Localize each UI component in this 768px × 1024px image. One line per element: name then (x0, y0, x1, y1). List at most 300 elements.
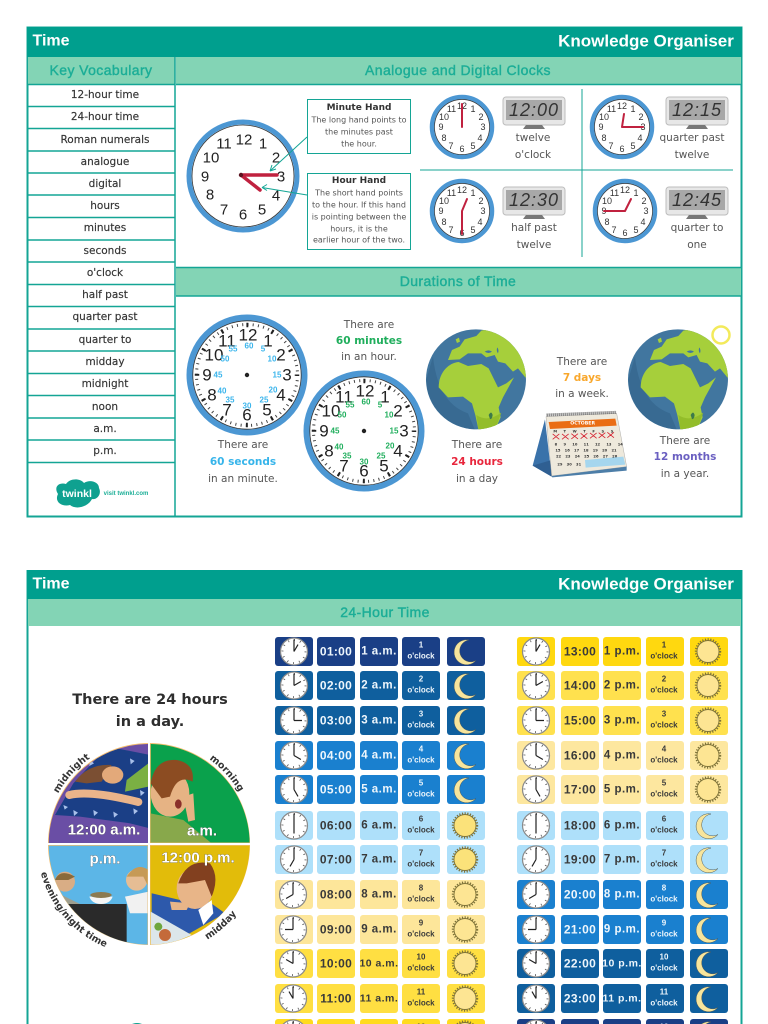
row: 02:00: 2 a.m. (361, 680, 397, 692)
icon: sun ring (712, 326, 730, 344)
clock: labelled clock: 6 (239, 206, 247, 224)
quadrant: evening and night (47, 845, 148, 945)
vocabulary list: 12-hour time (71, 89, 139, 101)
row: 20:00: 8 (662, 884, 667, 892)
row: 15:00: 3 p.m. (604, 714, 640, 726)
row: 02:00: 2 (419, 674, 424, 684)
row: 16:00: 4 (662, 744, 667, 754)
row: 09:00: 09:00 (320, 922, 352, 936)
row: 06:00: o'clock (407, 826, 435, 834)
panel: durations of time (176, 267, 741, 488)
clock: half past twelve: 4 (477, 217, 483, 227)
heading: analogue and digital clocks (176, 57, 741, 84)
row: 02:00: o'clock (407, 686, 435, 694)
clock: twelve o'clock: 8 (441, 133, 447, 143)
callout: minute hand: Minute Hand (327, 103, 391, 113)
icon: calendar: 29 30 31 (557, 463, 582, 467)
text: 60 seconds: in an minute. (208, 473, 278, 485)
vocabulary list: noon (92, 401, 118, 413)
row: 05:00: o'clock (407, 790, 435, 798)
text: 60 minutes: 60 minutes (336, 335, 402, 347)
row: 09:00: 9 (419, 918, 424, 928)
heading: there are 24 hours in a day: in a day. (116, 714, 184, 730)
clock: minutes: 60 (362, 398, 371, 406)
clock: half past twelve: 1 (470, 188, 476, 198)
row: 20:00: 8 p.m. (604, 888, 640, 900)
clock: minutes: 1 (380, 388, 390, 406)
clock: quarter to one: 9 (601, 206, 607, 216)
row: 10:00 (275, 949, 485, 978)
text: 60 minutes: There are (343, 319, 394, 331)
row: 09:00 (275, 915, 485, 944)
label: twelve o'clock (515, 132, 552, 161)
clock: quarter to one (595, 181, 655, 241)
vocabulary list: Roman numerals (60, 134, 150, 146)
row: 18:00 (517, 811, 728, 840)
clock: labelled clock: 5 (258, 202, 266, 218)
quadrant: midday (150, 845, 250, 947)
row: 00:00 (517, 1019, 728, 1024)
callout: hour hand: to the hour. If this hand (312, 200, 406, 210)
row: 13:00: 13:00 (564, 644, 596, 658)
clock: quarter past twelve: 12 (617, 101, 627, 111)
label: 12:00 p.m.: 12:00 p.m. (161, 850, 235, 866)
row: 18:00: 18:00 (564, 818, 596, 832)
row: 15:00: 15:00 (564, 714, 596, 728)
text: 24 hours: in a day (456, 473, 498, 485)
label: quarter past twelve: quarter past (660, 132, 724, 144)
clock: minutes: 4 (393, 442, 403, 460)
label: midnight: midnight (54, 754, 90, 793)
clock: seconds: 7 (222, 400, 232, 420)
row: 18:00: 6 (662, 814, 667, 824)
clock: quarter past twelve: 10 (599, 112, 609, 122)
title bar: Time (32, 32, 70, 50)
heading: there are 24 hours in a day: There are 24 hours (72, 692, 228, 708)
clock: quarter past twelve: 5 (630, 141, 636, 151)
row: 19:00: 7 (662, 848, 667, 858)
heading: 24-hour time: 24-Hour Time (340, 604, 430, 620)
panel: analogue and digital clocks (176, 57, 741, 257)
clock: half past twelve: 7 (448, 225, 454, 235)
row: 01:00: 1 a.m. (361, 646, 397, 658)
row: 04:00: o'clock (407, 756, 435, 764)
clock: quarter past twelve: 9 (598, 122, 604, 132)
row: 22:00: o'clock (650, 964, 678, 972)
arrow: minute hand (270, 137, 307, 171)
icon: earth (year) (628, 327, 733, 431)
clock: half past twelve: 5 (470, 225, 476, 235)
row: 05:00 (275, 775, 485, 804)
table: p.m. hours (517, 637, 728, 1024)
vocabulary list: p.m. (93, 445, 117, 457)
callout: minute hand: the hour. (341, 140, 377, 148)
clock: seconds: 11 (218, 332, 236, 350)
label: quarter past twelve: twelve (675, 149, 709, 161)
row: 14:00: 2 p.m. (604, 680, 640, 692)
row: 17:00: 17:00 (564, 782, 596, 796)
heading: key vocabulary: Key Vocabulary (50, 62, 152, 78)
row: 19:00 (517, 845, 728, 874)
row: 17:00: o'clock (650, 790, 678, 798)
row: 13:00: 1 p.m. (604, 646, 640, 658)
row: 07:00 (275, 845, 485, 874)
clock: quarter past twelve: 6 (619, 144, 625, 154)
row: 21:00: o'clock (650, 930, 678, 938)
heading: analogue and digital clocks: Analogue and Digital Clocks (365, 62, 551, 78)
clock: minutes: 9 (319, 422, 329, 440)
title bar (27, 570, 742, 599)
row: 06:00 (275, 811, 485, 840)
clock: minutes: 15 (390, 426, 399, 436)
clock: minutes: 25 (377, 452, 386, 460)
text: 60 seconds (208, 439, 278, 485)
clock: minutes (306, 374, 422, 488)
digital clock: 12:30: 12:30 (509, 190, 559, 210)
row: 19:00: 19:00 (564, 852, 596, 866)
clock: seconds: 3 (282, 366, 292, 384)
clock: minutes: 35 (343, 452, 352, 460)
row: 09:00: 9 a.m. (361, 924, 397, 936)
callout: minute hand: the minutes past (325, 128, 393, 136)
clock: quarter to one: 6 (622, 228, 628, 238)
text: 7 days (555, 356, 609, 400)
vocabulary list: seconds (84, 245, 126, 257)
label: twelve o'clock: twelve (516, 132, 550, 144)
icon: calendar: OCTOBER (570, 420, 595, 426)
clock: minutes: 5 (379, 456, 389, 476)
row: 10:00: 10:00 (320, 956, 352, 970)
clock: minutes: 12 (356, 382, 374, 400)
row: 17:00 (517, 775, 728, 804)
clock: twelve o'clock: 2 (478, 112, 484, 122)
callout: hour hand: hours, it is the (330, 224, 388, 234)
row: 21:00: 9 p.m. (604, 924, 640, 936)
row: 07:00: 7 a.m. (361, 854, 397, 866)
clock: twelve o'clock: 10 (439, 112, 449, 122)
row: 08:00: o'clock (407, 894, 435, 904)
clock: seconds: 35 (226, 396, 235, 404)
vocabulary list: digital (89, 178, 121, 190)
icon: calendar: M T W T F S S (553, 430, 614, 434)
clock: labelled clock: 10 (203, 150, 219, 166)
label: evening/night time: evening/night time (41, 872, 106, 947)
text: 24 hours: There are (451, 439, 502, 451)
heading: 24-hour time (28, 599, 741, 626)
row: 20:00: o'clock (650, 894, 678, 904)
row: 08:00: 8 a.m. (361, 888, 397, 900)
row: 21:00: 9 (662, 918, 667, 928)
clock: minutes: 7 (339, 456, 349, 476)
clock: twelve o'clock: 6 (459, 144, 465, 154)
row: 14:00: o'clock (650, 686, 678, 694)
row: 09:00: o'clock (407, 930, 435, 938)
row: 07:00: 07:00 (320, 852, 352, 866)
row: 06:00: 06:00 (320, 818, 352, 832)
row: 11:00: 11:00 (320, 992, 352, 1006)
vocabulary list: o'clock (87, 267, 124, 279)
text: 60 seconds: 60 seconds (210, 456, 276, 468)
vocabulary list: a.m. (93, 423, 117, 435)
clock: seconds: 55 (229, 344, 238, 354)
clock: twelve o'clock: 11 (447, 104, 456, 114)
clock: quarter to one: 4 (640, 217, 646, 227)
clock: minutes: 45 (331, 426, 340, 436)
clock: seconds: 9 (202, 366, 212, 384)
heading: durations of time (176, 267, 741, 296)
text: 7 days: There are (556, 356, 607, 368)
label: quarter to one: quarter to (671, 222, 723, 234)
row: 15:00: 3 (662, 710, 667, 718)
clock: seconds: 30 (243, 402, 252, 410)
clock: minutes: 30 (360, 458, 369, 466)
label: half past twelve: half past (511, 222, 557, 234)
row: 15:00: o'clock (650, 720, 678, 730)
row: 12:00 (275, 1019, 485, 1024)
chart: pie of the day (41, 743, 250, 947)
clock: quarter past twelve: 1 (630, 104, 636, 114)
title bar: Knowledge Organiser (558, 574, 734, 594)
clock: seconds: 50 (221, 354, 230, 364)
row: 17:00: 5 p.m. (604, 784, 640, 796)
clock: quarter to one: 5 (633, 225, 639, 235)
clock: seconds: 1 (263, 332, 273, 350)
clock: labelled clock: 7 (220, 202, 228, 218)
clock: half past twelve: 11 (447, 188, 456, 198)
callout: hour hand (308, 174, 410, 250)
row: 16:00: o'clock (650, 756, 678, 764)
row: 23:00: 11 p.m. (602, 992, 642, 1004)
clock: minutes: 10 (322, 402, 340, 420)
clock: twelve o'clock (432, 97, 492, 157)
clock: labelled clock: 3 (277, 168, 285, 186)
clock: quarter to one: 1 (633, 188, 639, 198)
clock: minutes: 3 (399, 422, 409, 440)
clock: half past twelve: 9 (438, 206, 444, 216)
vocabulary list: half past (82, 289, 128, 301)
callout: hour hand: earlier hour of the two. (313, 236, 405, 244)
row: 10:00: o'clock (407, 964, 435, 972)
callout: minute hand: The long hand points to (310, 116, 407, 124)
label: midday: midday (205, 910, 236, 940)
clock: minutes: 55 (346, 400, 355, 410)
text: 60 minutes (336, 319, 402, 363)
clock: minutes: 50 (338, 410, 347, 420)
icon: earth (day) (426, 327, 531, 431)
clock: seconds: 60 (245, 342, 254, 350)
digital clock: 12:15 (666, 97, 728, 129)
clock: seconds: 25 (260, 396, 269, 404)
label: half past twelve (511, 222, 557, 251)
clock: half past twelve: 8 (441, 217, 447, 227)
digital clock: 12:30 (503, 187, 565, 219)
clock: quarter to one: 10 (602, 196, 612, 206)
row: 22:00 (517, 949, 728, 978)
row: 01:00: o'clock (407, 652, 435, 660)
heading: key vocabulary (28, 57, 175, 84)
row: 04:00 (275, 741, 485, 770)
row: 04:00: 4 (419, 744, 424, 754)
row: 02:00: 02:00 (320, 678, 352, 692)
clock: quarter past twelve: 3 (640, 122, 646, 132)
clock: minutes: 11 (335, 388, 353, 406)
clock: twelve o'clock: 5 (470, 141, 476, 151)
vocabulary list (28, 57, 175, 517)
clock: quarter past twelve (592, 97, 652, 157)
text: 7 days: 7 days (563, 372, 601, 384)
row: 22:00: 10 p.m. (602, 958, 642, 970)
row: 22:00: 22:00 (564, 956, 596, 970)
clock: quarter to one: 3 (643, 206, 649, 216)
row: 08:00: 08:00 (320, 888, 352, 902)
heading: durations of time: Durations of Time (400, 273, 516, 289)
label: p.m.: p.m. (90, 850, 120, 868)
twinkl logo: twinkl (62, 488, 92, 500)
clock: quarter past twelve: 2 (638, 112, 644, 122)
clock: half past twelve (432, 181, 492, 241)
table: a.m. hours (275, 637, 485, 1024)
clock: labelled clock: 1 (259, 136, 267, 152)
icon: calendar: 22 23 24 25 26 27 28 (556, 455, 618, 459)
text: 24 hours: 24 hours (451, 456, 503, 468)
callout: minute hand (308, 100, 410, 154)
row: 01:00 (275, 637, 485, 666)
row: 11:00 (275, 984, 485, 1013)
callout: hour hand: Hour Hand (332, 176, 386, 186)
clock: quarter to one: 8 (604, 217, 610, 227)
clock: labelled clock: 11 (216, 136, 232, 152)
row: 22:00: 10 (660, 952, 669, 962)
row: 03:00: o'clock (407, 720, 435, 730)
row: 14:00: 14:00 (564, 678, 596, 692)
row: 15:00 (517, 706, 728, 735)
clock: half past twelve: 3 (480, 206, 486, 216)
row: 05:00: 5 a.m. (361, 784, 397, 796)
clock: seconds: 6 (242, 406, 252, 424)
row: 23:00 (517, 984, 728, 1013)
text: 12 months: There are (659, 435, 710, 447)
clock: half past twelve: 2 (478, 196, 484, 206)
clock: half past twelve: 6 (459, 228, 465, 238)
clock: twelve o'clock: 4 (477, 133, 483, 143)
row: 02:00 (275, 671, 485, 700)
quadrant: morning (150, 743, 250, 843)
row: 08:00 (275, 880, 485, 909)
label: quarter to one (671, 222, 723, 251)
vocabulary list: hours (90, 200, 120, 212)
panel: key vocabulary (28, 57, 175, 517)
panel: page one knowledge organiser (27, 27, 742, 517)
row: 06:00: 6 (419, 814, 424, 824)
row: 13:00 (517, 637, 728, 666)
row: 13:00: o'clock (650, 652, 678, 660)
clock: seconds: 10 (205, 346, 223, 364)
clock: minutes: 10 (385, 410, 394, 420)
clock: labelled clock: 4 (272, 188, 280, 204)
clock: seconds: 5 (261, 344, 266, 354)
row: 08:00: 8 (419, 884, 424, 892)
text: 12 months: 12 months (654, 451, 716, 463)
vocabulary list: 24-hour time (71, 111, 139, 123)
clock: labelled clock: 2 (272, 150, 280, 166)
title bar (27, 27, 742, 57)
clock: seconds: 40 (218, 386, 227, 396)
row: 17:00: 5 (662, 778, 667, 788)
clock: labelled clock: 9 (201, 168, 209, 186)
clock: seconds: 15 (273, 370, 282, 380)
digital clock: 12:00 (503, 97, 565, 129)
panel frame (28, 570, 742, 1024)
text: 60 minutes: in an hour. (341, 351, 397, 363)
row: 14:00 (517, 671, 728, 700)
row: 03:00: 3 (419, 710, 424, 718)
twinkl logo (cropped) (127, 1023, 147, 1024)
panel background (28, 28, 742, 516)
label: quarter past twelve (660, 132, 724, 161)
label: half past twelve: twelve (517, 239, 551, 251)
row: 16:00: 4 p.m. (604, 750, 640, 762)
digital clock: 12:00: 12:00 (509, 100, 559, 120)
row: 11:00: o'clock (407, 998, 435, 1008)
clock: seconds: 12 (239, 326, 257, 344)
label: morning: morning (210, 756, 244, 792)
icon: calendar: 8 9 10 11 12 13 14 (555, 443, 623, 447)
text: 24 hours (451, 439, 503, 485)
row: 23:00: 23:00 (564, 992, 596, 1006)
row: 20:00: 20:00 (564, 888, 596, 902)
icon: calendar (533, 412, 627, 477)
clock: seconds: 20 (269, 386, 278, 394)
row: 05:00: 5 (419, 778, 424, 788)
digital clock: 12:15: 12:15 (672, 100, 722, 120)
row: 21:00 (517, 915, 728, 944)
label: quarter to one: one (687, 239, 707, 251)
row: 03:00 (275, 706, 485, 735)
icon: calendar: 15 16 17 18 19 20 21 (555, 449, 617, 453)
clock: seconds (190, 318, 304, 432)
row: 10:00: 10 a.m. (359, 958, 399, 970)
row: 06:00: 6 a.m. (361, 820, 397, 832)
clock: quarter to one: 2 (641, 196, 647, 206)
clock: seconds: 4 (276, 386, 286, 404)
label: a.m.: a.m. (187, 822, 217, 840)
vocabulary list: quarter past (72, 311, 138, 323)
row: 01:00: 1 (419, 640, 424, 650)
arrow: hour hand (262, 184, 307, 195)
clock: minutes: 8 (324, 442, 334, 460)
heading: there are 24 hours in a day (72, 692, 228, 730)
twinkl logo (56, 479, 148, 507)
twinkl logo: visit twinkl.com (104, 491, 148, 497)
clock: twelve o'clock: 7 (448, 141, 454, 151)
row: 13:00: 1 (662, 640, 667, 650)
row: 11:00: 11 (417, 988, 426, 996)
vocabulary list: quarter to (79, 334, 131, 346)
clock: minutes: 5 (378, 400, 383, 410)
digital clock: 12:45 (666, 187, 728, 219)
clock: seconds: 45 (214, 370, 223, 380)
clock: twelve o'clock: 9 (438, 122, 444, 132)
title bar: Time (32, 576, 70, 592)
row: 18:00: o'clock (650, 826, 678, 834)
clock: seconds: 8 (207, 386, 217, 404)
clock: seconds: 5 (262, 400, 272, 420)
clock: quarter past twelve: 4 (637, 133, 643, 143)
clock: minutes: 2 (393, 402, 403, 420)
clock: quarter to one: 7 (611, 225, 617, 235)
row: 21:00: 21:00 (564, 922, 596, 936)
clock: minutes: 6 (359, 462, 369, 480)
